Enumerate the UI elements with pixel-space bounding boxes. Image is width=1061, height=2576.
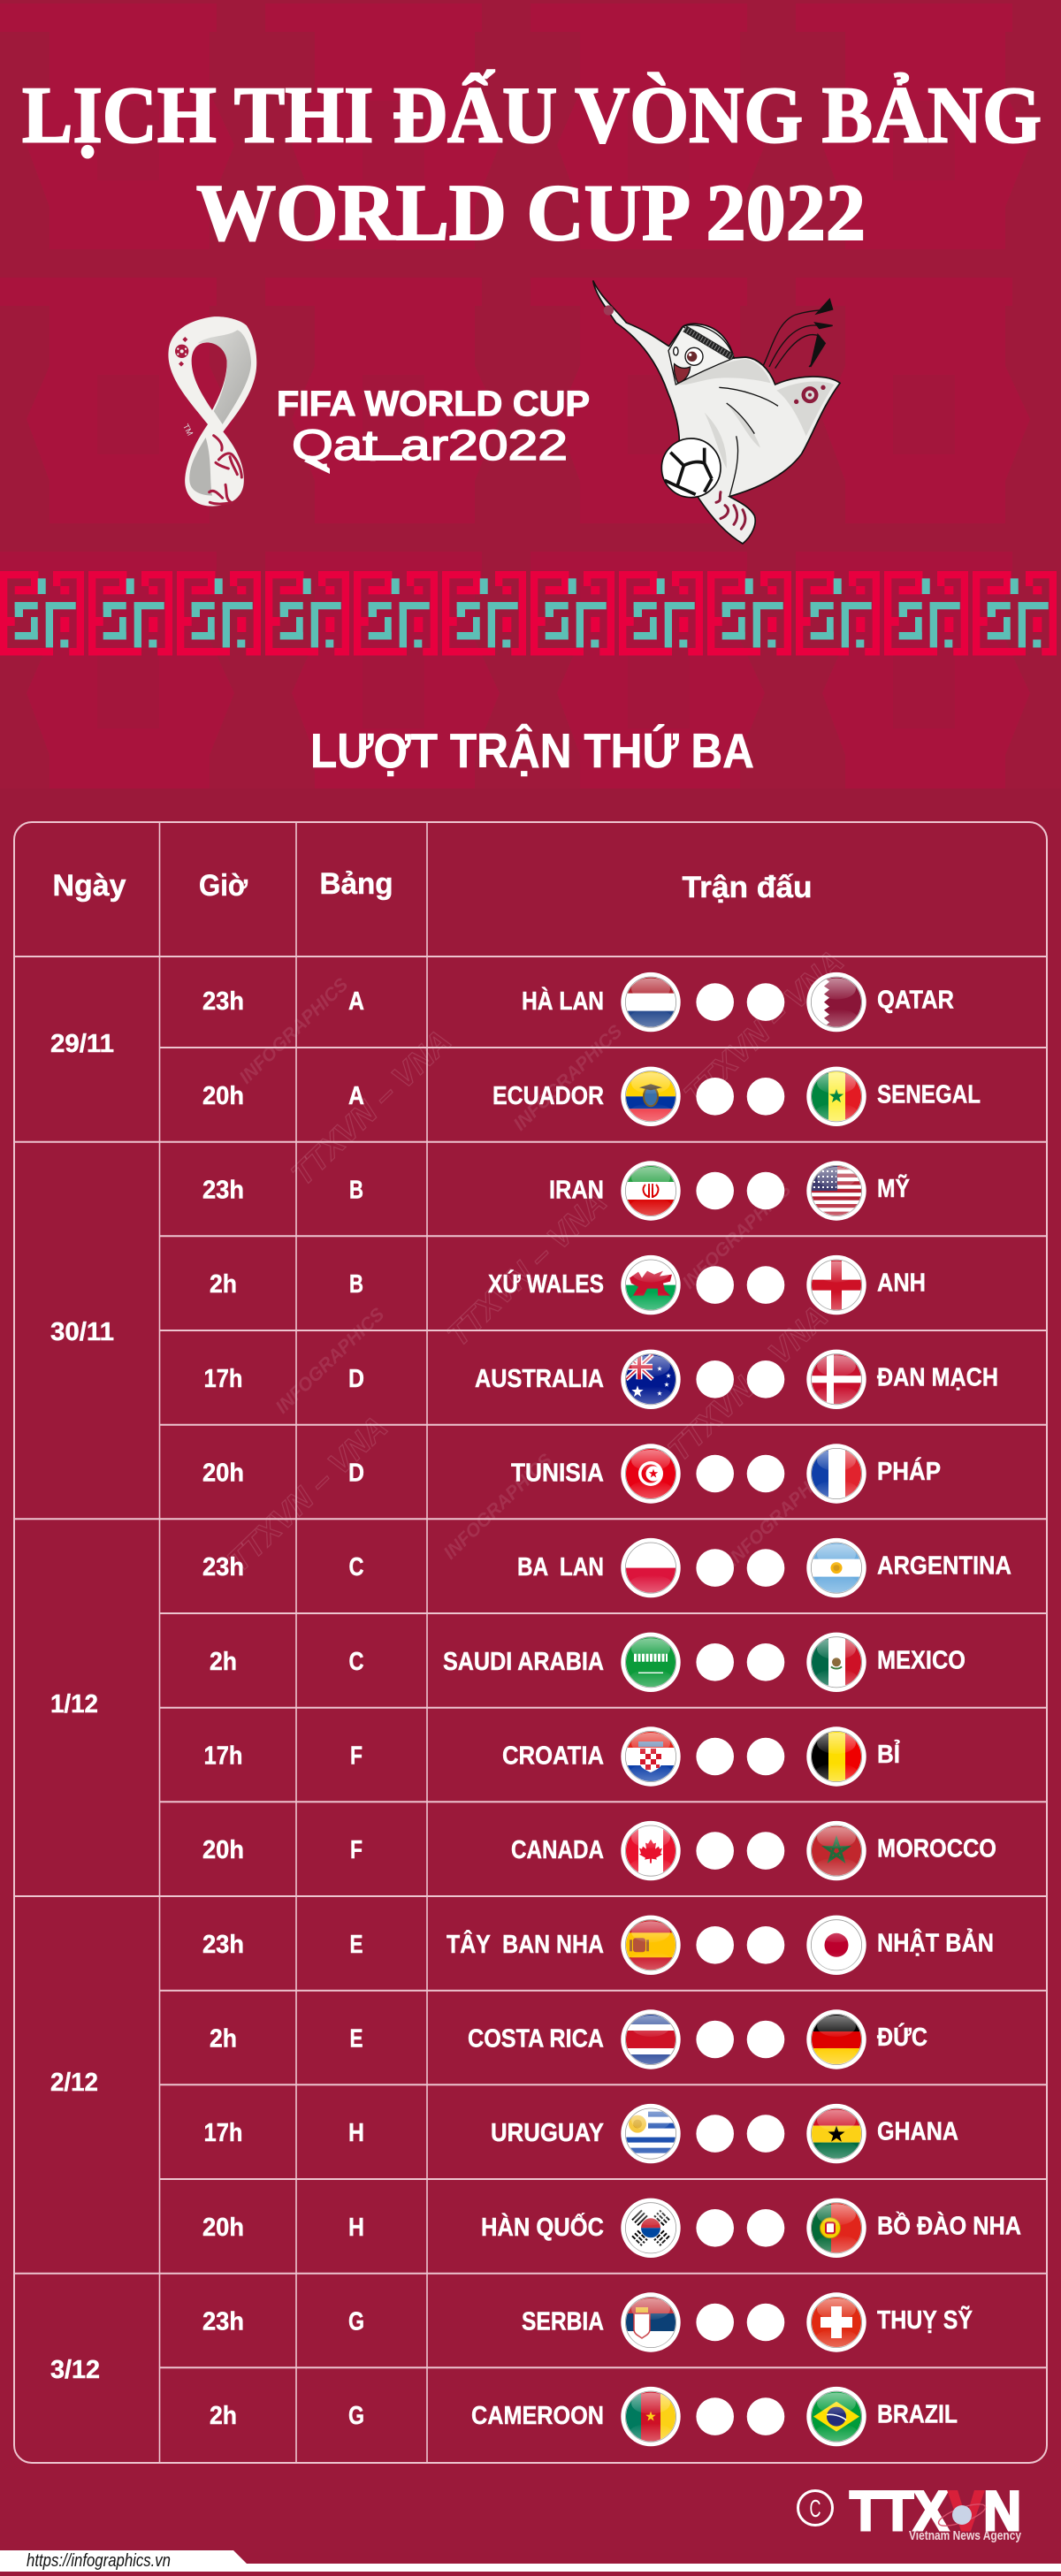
flag: Qatar xyxy=(806,972,866,1032)
flag: Morocco xyxy=(806,1821,866,1880)
row: Tunisia - Pháp: TUNISIA xyxy=(511,1459,604,1487)
TTXVN logo: Vietnam News Agency xyxy=(909,2528,1022,2543)
row: Cameroon - Brazil: 2h xyxy=(210,2402,237,2430)
flag: Australia xyxy=(621,1350,681,1409)
icon: FIFA World Cup Qatar 2022 wordmark: Qat xyxy=(292,423,378,469)
row: Serbia - Thuỵ Sỹ: THUỴ SỸ xyxy=(877,2306,973,2335)
row: Ecuador - Senegal: 20h xyxy=(202,1082,244,1110)
source url: https://infographics.vn xyxy=(27,2551,171,2571)
head xyxy=(683,325,734,358)
score circles xyxy=(696,2115,784,2153)
score circles xyxy=(696,1926,784,1964)
row: Saudi Arabia - Mexico xyxy=(210,1633,966,1692)
TTXVN logo: TTXVN xyxy=(850,2481,1021,2542)
row: Hàn Quốc - Bồ Đào Nha: 20h xyxy=(202,2214,244,2242)
row: Cameroon - Brazil xyxy=(210,2387,958,2446)
row: Ba Lan - Argentina xyxy=(202,1538,1011,1597)
row: Iran - Mỹ: MỸ xyxy=(877,1175,910,1203)
score circles xyxy=(696,983,784,1021)
row: Saudi Arabia - Mexico: SAUDI ARABIA xyxy=(443,1648,604,1676)
row: Australia - Đan Mạch xyxy=(203,1350,998,1409)
row: Ba Lan - Argentina: ARGENTINA xyxy=(877,1552,1011,1581)
row: Uruguay - Ghana xyxy=(203,2104,958,2163)
flag: Netherlands xyxy=(621,972,681,1032)
row: Ecuador - Senegal xyxy=(202,1067,981,1126)
background pattern panel xyxy=(0,0,1061,789)
row: Tunisia - Pháp: 20h xyxy=(202,1459,244,1487)
row: Ecuador - Senegal: SENEGAL xyxy=(877,1080,981,1109)
watermarks: TTXVN – VNA xyxy=(660,1299,835,1468)
row: Canada - Morocco xyxy=(202,1821,996,1880)
watermarks: INFOGRAPHICS xyxy=(509,1021,626,1135)
icon: FIFA World Cup Qatar 2022 wordmark: ar2022 xyxy=(401,423,568,469)
row: Costa Rica - Đức: 2h xyxy=(210,2024,237,2053)
flag: Tunisia xyxy=(621,1444,681,1504)
score circles xyxy=(696,1172,784,1209)
watermarks: INFOGRAPHICS xyxy=(439,1450,556,1564)
flag: Ghana xyxy=(806,2104,866,2163)
score circles xyxy=(696,1549,784,1587)
score circles xyxy=(696,2021,784,2058)
flag: Portugal xyxy=(806,2199,866,2258)
row: Hà Lan - Qatar: 23h xyxy=(202,987,244,1016)
flag: Brazil xyxy=(806,2387,866,2446)
table header xyxy=(53,867,812,904)
tassels xyxy=(763,299,833,369)
row: Uruguay - Ghana: URUGUAY xyxy=(491,2119,604,2147)
row: Hàn Quốc - Bồ Đào Nha xyxy=(202,2199,1021,2258)
row: Croatia - Bỉ xyxy=(203,1726,900,1787)
flag: Japan xyxy=(806,1916,866,1975)
flag: Switzerland xyxy=(806,2292,866,2352)
row: Iran - Mỹ: IRAN xyxy=(549,1176,604,1204)
decorative band xyxy=(0,571,1061,656)
watermarks: INFOGRAPHICS xyxy=(235,974,352,1088)
row: Tunisia - Pháp: D xyxy=(348,1459,364,1487)
score circles xyxy=(696,1078,784,1116)
flag: Mexico xyxy=(806,1633,866,1692)
row: Costa Rica - Đức: E xyxy=(350,2024,363,2053)
row: Uruguay - Ghana: GHANA xyxy=(877,2118,958,2146)
icon: FIFA World Cup Qatar 2022 wordmark xyxy=(277,385,590,474)
row: Cameroon - Brazil: G xyxy=(348,2402,364,2430)
row: Saudi Arabia - Mexico: 2h xyxy=(210,1648,237,1676)
flag: Belgium xyxy=(806,1726,866,1787)
dates column: 29/11 xyxy=(50,1030,114,1058)
body xyxy=(593,280,840,544)
flag: Croatia xyxy=(621,1726,681,1787)
row: Costa Rica - Đức: COSTA RICA xyxy=(468,2024,604,2053)
table header: Trận đấu xyxy=(683,871,812,904)
flag: France xyxy=(806,1444,866,1504)
flag: Costa Rica xyxy=(621,2009,681,2069)
row: Costa Rica - Đức xyxy=(210,2009,927,2069)
row: Iran - Mỹ: 23h xyxy=(202,1176,244,1204)
row: Canada - Morocco: CANADA xyxy=(511,1836,604,1864)
row: Serbia - Thuỵ Sỹ: SERBIA xyxy=(522,2307,604,2336)
watermarks: TTXVN – VNA xyxy=(220,1409,394,1579)
watermarks xyxy=(220,943,851,1579)
watermarks: INFOGRAPHICS xyxy=(722,1457,839,1571)
row: Ecuador - Senegal: ECUADOR xyxy=(492,1082,604,1110)
row: Croatia - Bỉ: BỈ xyxy=(877,1740,900,1769)
row: Ba Lan - Argentina: C xyxy=(348,1553,364,1581)
watermarks: TTXVN – VNA xyxy=(439,1184,614,1353)
score circles xyxy=(696,1266,784,1304)
row: Hà Lan - Qatar xyxy=(202,972,954,1032)
row: Serbia - Thuỵ Sỹ xyxy=(202,2292,973,2352)
row: Uruguay - Ghana: H xyxy=(348,2119,364,2147)
row: Australia - Đan Mạch: AUSTRALIA xyxy=(475,1365,604,1393)
dates column: 1/12 xyxy=(50,1690,98,1719)
flag: USA xyxy=(806,1161,866,1221)
row: Xứ Wales - Anh xyxy=(210,1255,926,1315)
score circles xyxy=(696,1360,784,1399)
row: Tây Ban Nha - Nhật Bản: NHẬT BẢN xyxy=(877,1928,994,1957)
flag: Iran xyxy=(621,1161,681,1221)
flag: Senegal xyxy=(806,1067,866,1126)
row: Tây Ban Nha - Nhật Bản: 23h xyxy=(202,1931,244,1959)
row: Cameroon - Brazil: BRAZIL xyxy=(877,2401,958,2429)
flag: Spain xyxy=(621,1916,681,1975)
row: Croatia - Bỉ: F xyxy=(350,1741,363,1770)
row: Xứ Wales - Anh: ANH xyxy=(877,1269,926,1298)
row: Cameroon - Brazil: CAMEROON xyxy=(471,2402,604,2430)
row: Canada - Morocco: F xyxy=(350,1836,363,1864)
icon: La'eeb mascot xyxy=(593,280,840,544)
row: Ba Lan - Argentina: BA LAN xyxy=(517,1553,604,1581)
icon: FIFA World Cup emblem xyxy=(168,316,256,507)
row: Ecuador - Senegal: A xyxy=(348,1082,364,1110)
row: Hà Lan - Qatar: A xyxy=(348,987,364,1016)
flag: Argentina xyxy=(806,1538,866,1597)
row: Croatia - Bỉ: 17h xyxy=(203,1741,242,1770)
title xyxy=(22,71,1042,257)
ornaments xyxy=(804,388,816,401)
copyright icon xyxy=(798,2491,833,2525)
row: Hàn Quốc - Bồ Đào Nha: HÀN QUỐC xyxy=(481,2213,604,2242)
row: Xứ Wales - Anh: 2h xyxy=(210,1270,237,1299)
dates column: 30/11 xyxy=(50,1318,114,1346)
row: Tunisia - Pháp: PHÁP xyxy=(877,1458,941,1486)
row: Serbia - Thuỵ Sỹ: 23h xyxy=(202,2307,244,2336)
schedule table grid xyxy=(14,822,1047,2463)
flag: Ecuador xyxy=(621,1067,681,1126)
dates column: 3/12 xyxy=(50,2356,100,2384)
row: Serbia - Thuỵ Sỹ: G xyxy=(348,2307,364,2336)
row: Saudi Arabia - Mexico: MEXICO xyxy=(877,1646,966,1674)
row: Hàn Quốc - Bồ Đào Nha: BỒ ĐÀO NHA xyxy=(877,2212,1021,2240)
row: Croatia - Bỉ: CROATIA xyxy=(502,1741,604,1770)
row: Uruguay - Ghana: 17h xyxy=(203,2119,242,2147)
row: Iran - Mỹ xyxy=(202,1161,910,1221)
row: Canada - Morocco: 20h xyxy=(202,1836,244,1864)
score circles xyxy=(696,2304,784,2341)
score circles xyxy=(696,1738,784,1775)
flag: Germany xyxy=(806,2009,866,2069)
row: Tây Ban Nha - Nhật Bản xyxy=(202,1916,994,1975)
icon: FIFA World Cup emblem: TM xyxy=(181,423,195,437)
title: WORLD CUP 2022 xyxy=(196,168,866,257)
row: Australia - Đan Mạch: 17h xyxy=(203,1365,242,1393)
flag: England xyxy=(806,1255,866,1315)
score circles xyxy=(696,1832,784,1870)
watermarks: TTXVN – VNA xyxy=(284,1023,458,1193)
watermarks: INFOGRAPHICS xyxy=(678,1179,795,1293)
row: Tunisia - Pháp xyxy=(202,1444,941,1504)
flag: Poland xyxy=(621,1538,681,1597)
flag: Denmark xyxy=(806,1350,866,1409)
flag: South Korea xyxy=(621,2199,681,2258)
table header: Ngày xyxy=(53,869,126,903)
flag: Uruguay xyxy=(621,2104,681,2163)
table header: Giờ xyxy=(199,869,248,903)
score circles xyxy=(696,1455,784,1492)
row: Hà Lan - Qatar: HÀ LAN xyxy=(522,987,604,1016)
icon: FIFA World Cup Qatar 2022 wordmark: FIFA WORLD CUP xyxy=(277,385,590,423)
flag: Serbia xyxy=(621,2292,681,2352)
row: Ba Lan - Argentina: 23h xyxy=(202,1553,244,1581)
row: Xứ Wales - Anh: B xyxy=(349,1270,363,1299)
row: Australia - Đan Mạch: D xyxy=(348,1365,364,1393)
ball xyxy=(661,438,721,498)
row: Hà Lan - Qatar: QATAR xyxy=(877,987,954,1015)
row: Canada - Morocco: MOROCCO xyxy=(877,1835,996,1863)
flag: Saudi Arabia xyxy=(621,1633,681,1692)
heading: third round: LƯỢT TRẬN THỨ BA xyxy=(310,723,754,778)
score circles xyxy=(696,1643,784,1681)
flag: Canada xyxy=(621,1821,681,1880)
watermarks: TTXVN – VNA xyxy=(676,943,851,1113)
flag: Wales xyxy=(621,1255,681,1315)
row: Tây Ban Nha - Nhật Bản: E xyxy=(350,1931,363,1959)
dates column xyxy=(50,1030,114,2384)
row: Tây Ban Nha - Nhật Bản: TÂY BAN NHA xyxy=(447,1931,604,1959)
table header: Bảng xyxy=(320,867,393,901)
row: Xứ Wales - Anh: XỨ WALES xyxy=(488,1270,604,1299)
row: Saudi Arabia - Mexico: C xyxy=(348,1648,364,1676)
row: Hàn Quốc - Bồ Đào Nha: H xyxy=(348,2214,364,2242)
flag: Cameroon xyxy=(621,2387,681,2446)
copyright icon: C xyxy=(810,2495,821,2522)
row: Iran - Mỹ: B xyxy=(349,1176,363,1204)
row: Australia - Đan Mạch: ĐAN MẠCH xyxy=(877,1363,998,1391)
score circles xyxy=(696,2209,784,2247)
dates column: 2/12 xyxy=(50,2069,98,2097)
watermarks: INFOGRAPHICS xyxy=(271,1304,388,1418)
footer strip xyxy=(0,2550,1061,2572)
row: Costa Rica - Đức: ĐỨC xyxy=(877,2023,927,2052)
score circles xyxy=(696,2397,784,2435)
